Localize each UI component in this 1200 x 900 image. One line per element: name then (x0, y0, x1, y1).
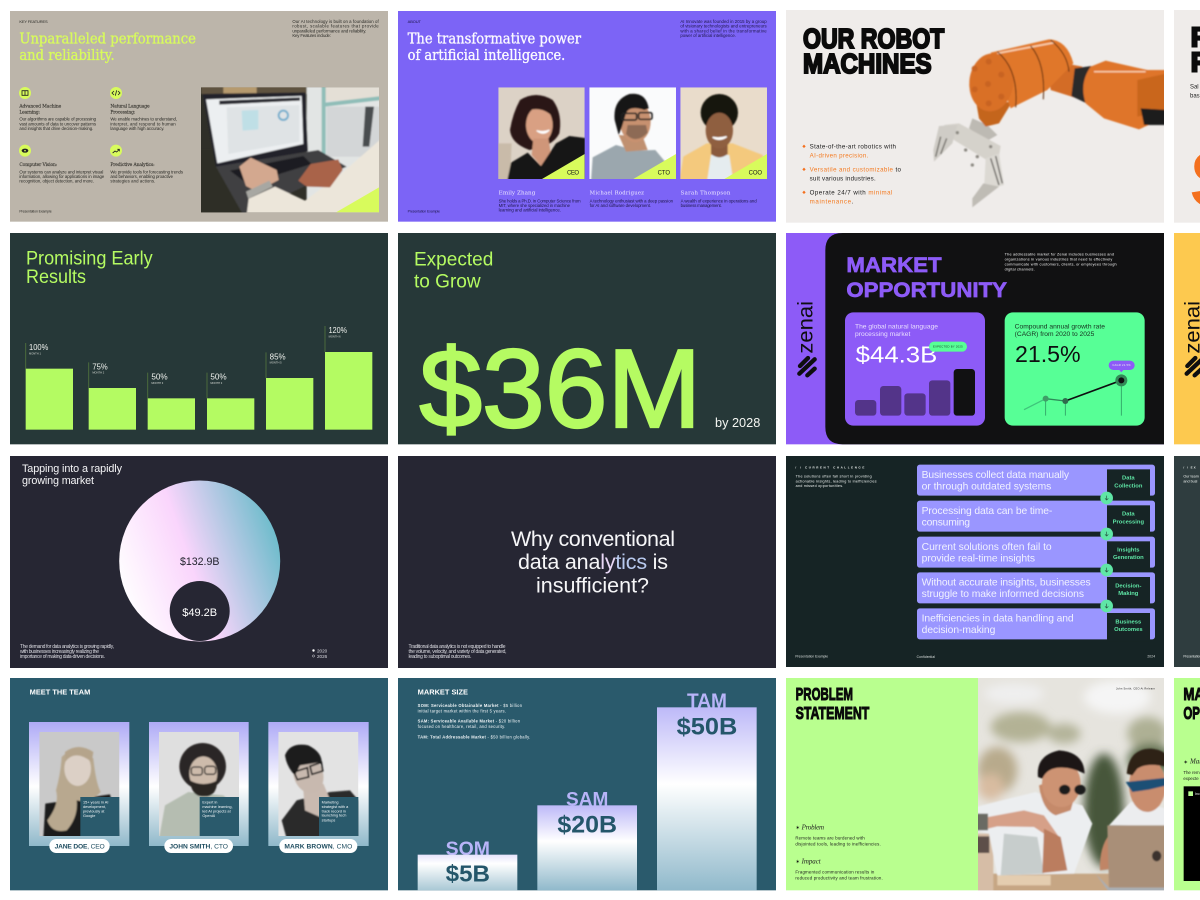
heading: Expected (414, 250, 493, 271)
problem note: ✶ (795, 826, 800, 832)
panel: partial slide, right edge top (1174, 10, 1200, 224)
process row 5: Inefficiencies in data handling and (922, 613, 1074, 624)
feature: natural language processing: We enable machines to understand, (110, 117, 177, 122)
feature: advanced machine learning: and insights that drive decision-making. (19, 126, 93, 131)
impact note: ✶ (795, 860, 800, 866)
process row 5: decision-making (922, 625, 996, 636)
heading: Results (26, 267, 86, 288)
bio: Sarah Thompson (681, 191, 757, 208)
partial heading letters (1191, 22, 1200, 78)
panel: partial market opportunity slide, right edge (1174, 678, 1200, 890)
panel: partial expertise slide, right edge (1174, 456, 1200, 667)
definitions: TAM: Total Addressable Market - $50 billion globally. (418, 735, 530, 740)
nested circle chart (119, 480, 280, 642)
bar chart (26, 326, 372, 430)
bar: SAM: $20B (557, 812, 617, 839)
process row 2 (917, 501, 1155, 534)
logo: zenai (793, 301, 817, 375)
bio box: Mark Brown (319, 797, 358, 836)
problem note: Problem (801, 823, 824, 831)
photo: Michael Rodriguez (589, 87, 676, 179)
heading: PROBLEM (796, 684, 853, 704)
process row 3: Generation (1113, 555, 1144, 561)
card: CAGR line chart: (CAGR) from 2020 to 2025 (1015, 331, 1095, 338)
bio: Sarah Thompson: A wealth of experience in operations and (681, 198, 757, 203)
team card: Mark Brown (268, 722, 369, 853)
bullet list: AI-driven precision. (810, 153, 869, 160)
footer: Presentation Example (795, 655, 828, 659)
intro text: communicate with customers, clients, or employees through (1005, 263, 1117, 267)
legend: 2026 (317, 654, 328, 659)
intro text (1005, 253, 1117, 271)
bar: TAM (657, 691, 757, 890)
panel: market size slide (398, 678, 776, 890)
feature: advanced machine learning: Our algorithms are capable of processing (19, 117, 97, 122)
bio box: Jane Doe: development, (83, 805, 106, 809)
card: CAGR line chart: CAGR 21.5% (1112, 363, 1131, 367)
feature: natural language processing (110, 104, 177, 131)
bar: SOM: SOM (446, 839, 490, 860)
image: orange robot arm with gripper (933, 38, 1164, 208)
heading: Promising Early (26, 249, 153, 270)
process row 4: struggle to make informed decisions (922, 589, 1084, 600)
bio box: John Smith (200, 797, 239, 836)
icon: eye (19, 145, 31, 157)
role tag: CEO: CEO (567, 171, 579, 177)
description: actionable insights, leading to inefficiencies (796, 479, 877, 483)
bar chart: 50% (151, 373, 168, 382)
intro text: with a shared belief in the transformative (680, 28, 767, 33)
heading: unparalleled performance: and reliability. (19, 47, 115, 64)
bio box: Jane Doe: previously at (83, 809, 105, 813)
panel: expected to grow slide (398, 233, 776, 451)
about label: ABOUT (408, 19, 422, 24)
bar chart: MONTH 1 (29, 351, 41, 355)
role tag: COO: COO (749, 171, 762, 177)
process row 1: Data (1122, 476, 1135, 482)
process row 5: Outcomes (1114, 627, 1143, 633)
by 2028 note: by 2028 (715, 416, 760, 430)
bullet list: State-of-the-art robotics with (810, 143, 897, 150)
bar chart: 85% (270, 352, 286, 361)
team card: Jane Doe (29, 722, 129, 853)
bio: Michael Rodriguez: for AI and software development. (590, 203, 651, 208)
process row 3: Current solutions often fail to (922, 542, 1052, 553)
definitions: SAM: Serviceable Available Market - $20 billion (418, 719, 521, 724)
partial market note: ✶ (1183, 760, 1188, 766)
feature: natural language processing: Natural Language (110, 104, 150, 110)
partial label and text: / / EX (1183, 465, 1197, 469)
card: CAGR line chart: 21.5% (1015, 341, 1081, 367)
icon: code (110, 87, 122, 99)
problem note (795, 823, 881, 847)
panel: meet the team slide (10, 678, 388, 890)
panel: current challenge slide (786, 456, 1164, 667)
large question: data analytics is (518, 550, 668, 574)
definitions: initial target market within the first 5 years. (418, 708, 506, 713)
bio box: John Smith: Expert in (202, 801, 217, 805)
photo: Emily Zhang (498, 87, 585, 179)
large question: insufficient? (536, 574, 649, 598)
impact note (795, 857, 883, 881)
card: market size bar chart: The global natural language (855, 323, 938, 330)
process row 3 (917, 537, 1155, 570)
feature: advanced machine learning (18, 104, 97, 131)
bio: Emily Zhang: She holds a Ph.D. in Computer Science from (499, 198, 581, 203)
heading: to Grow (414, 271, 481, 292)
partial market note (1183, 758, 1200, 781)
process row 2: Processing (1113, 519, 1144, 525)
large question: Why conventional (511, 527, 675, 551)
impact note: Impact (801, 857, 822, 865)
feature: predictive analytics: We provide tools for forecasting trends (110, 169, 183, 174)
card: CAGR line chart (1005, 312, 1145, 426)
feature: advanced machine learning: vast amounts of data to uncover patterns (19, 121, 96, 126)
partial black chart box (1184, 786, 1200, 881)
bio box: Mark Brown: Marketing (322, 801, 338, 805)
bio box: John Smith: machine learning, (202, 805, 233, 809)
bio: Michael Rodriguez (590, 191, 674, 208)
card: market size bar chart: EXPECTED BY 2025 (933, 344, 963, 348)
bullet list: suit various industries. (810, 176, 876, 183)
partial subtitle (1190, 84, 1200, 100)
team card: Jane Doe: JANE DOE, CEO (55, 843, 105, 850)
partial market note: The rem (1183, 770, 1200, 775)
heading (22, 463, 123, 487)
intro text (292, 19, 379, 38)
definitions: SOM: Serviceable Obtainable Market - $5 billion (418, 703, 523, 708)
impact note: Fragmented communication results in (795, 870, 875, 875)
photo: two men at a laptop (978, 678, 1164, 890)
panel: problem statement slide (786, 678, 1174, 892)
problem note: disjointed tools, leading to inefficiencies. (795, 842, 881, 847)
bar chart: MONTH 3 (151, 381, 164, 385)
feature: advanced machine learning: Learning: (19, 110, 40, 116)
bio box: Jane Doe: 15+ years in AI (83, 801, 108, 805)
bar: SOM: $5B (446, 860, 490, 886)
bio: Emily Zhang: learning and artificial intelligence. (499, 208, 561, 213)
feature: natural language processing: Processing: (110, 110, 136, 116)
key features label: KEY FEATURES (19, 19, 48, 24)
feature: natural language processing: interpret, and respond to human (110, 121, 176, 126)
definitions: focused on healthcare, retail, and security. (418, 724, 505, 729)
bio box: John Smith: OpenAI (202, 814, 215, 818)
feature: computer vision: Our systems can analyze and interpret visual (19, 169, 103, 174)
bar: SAM (537, 790, 637, 890)
partial label and text: Our team (1183, 474, 1199, 478)
bio box: Jane Doe (80, 797, 119, 836)
process row 5 (917, 608, 1155, 641)
legend (312, 648, 328, 659)
bio: Michael Rodriguez: Michael Rodriguez (590, 191, 644, 197)
feature: predictive analytics: Predictive Analytics: (110, 162, 155, 168)
heading: MEET THE TEAM (30, 688, 90, 697)
process row 2: Data (1122, 512, 1135, 518)
process row 1 (917, 465, 1155, 498)
process row 3: provide real-time insights (922, 553, 1035, 564)
process row 1: or through outdated systems (922, 481, 1051, 492)
bar chart: 100% (29, 343, 48, 352)
card: market size bar chart: processing market (855, 331, 910, 338)
logo: zenai: zenai (793, 301, 817, 354)
description (20, 644, 114, 660)
heading: our robot machines: MACHINES (803, 48, 932, 79)
feature: predictive analytics: strategies and actions. (110, 179, 155, 184)
process row 4: Making (1118, 591, 1139, 597)
description: importance of making data-driven decisions. (20, 654, 105, 660)
bar chart: MONTH 3 (210, 381, 223, 385)
bio box: Mark Brown: strategist with a (322, 805, 349, 809)
bar: SAM: SAM (566, 790, 608, 811)
process row 1: Collection (1114, 483, 1143, 489)
icon: trend arrow (110, 145, 122, 157)
panel: conventional analytics question slide (398, 456, 776, 668)
heading (414, 250, 493, 292)
description: Traditional data analytics is not equipped to handle (408, 644, 506, 650)
bio: Sarah Thompson: business management. (681, 203, 722, 208)
bar chart: 75% (92, 362, 108, 371)
process row 3: Insights (1117, 548, 1140, 554)
bio box: Mark Brown: launching tech (322, 814, 346, 818)
heading: transformative power: of artificial intelligence. (408, 47, 565, 64)
heading: our robot machines: OUR ROBOT (803, 23, 944, 54)
process row 5: Business (1115, 619, 1141, 625)
heading: unparalleled performance (19, 30, 196, 64)
intro text: robust, scalable features that provide (292, 24, 379, 29)
intro text: AI Innovate was founded in 2015 by a group (680, 19, 767, 24)
feature: predictive analytics (110, 162, 183, 184)
intro text: organizations in various industries that need to effectively (1005, 258, 1112, 262)
feature: predictive analytics: and behaviors, enabling proactive (110, 174, 174, 179)
process row 4: Decision- (1115, 584, 1142, 590)
description (408, 644, 506, 660)
partial subtitle: Sal (1190, 84, 1199, 90)
role tag: CTO: CTO (658, 171, 670, 177)
process row 4: Without accurate insights, businesses (922, 578, 1091, 589)
process row 2: Processing data can be time- (922, 506, 1052, 517)
definitions (418, 703, 530, 740)
partial label and text (1183, 465, 1200, 659)
panel: promising early results slide (10, 233, 388, 444)
impact note: reduced productivity and team frustration. (795, 876, 883, 881)
nested circle chart: $132.9B (180, 556, 219, 568)
intro text: The addressable market for Zenai includes businesses and (1005, 253, 1114, 257)
bio: Emily Zhang (499, 191, 581, 213)
heading (26, 249, 153, 288)
bio box: Jane Doe: Google (83, 814, 95, 818)
feature: computer vision: recognition, object detection, and more. (19, 179, 94, 184)
description: The solutions often fall short in providing (796, 474, 872, 478)
heading: Tapping into a rapidly (22, 463, 123, 475)
nested circle chart: $49.2B (182, 607, 217, 619)
team card: Mark Brown: MARK BROWN, CMO (284, 843, 352, 850)
footer: Confidential (917, 655, 935, 659)
feature: advanced machine learning: Advanced Machine (18, 104, 62, 110)
heading: MARKET (846, 253, 942, 277)
legend: 2020 (317, 648, 328, 654)
bar chart: MONTH 2 (92, 371, 105, 375)
team card: John Smith: JOHN SMITH, CTO (169, 843, 228, 850)
bar chart: 50% (210, 373, 227, 382)
large question (511, 527, 675, 598)
heading: unparalleled performance: Unparalleled performance (19, 30, 196, 47)
feature: computer vision (19, 162, 105, 184)
heading: MARKET SIZE (418, 690, 468, 697)
feature: computer vision: information, allowing for applications in image (19, 174, 105, 179)
bullet list (802, 143, 902, 206)
footer (795, 655, 1155, 659)
bullet list: Versatile and customizable to (810, 166, 902, 173)
panel: partial zenai slide, right edge (1174, 233, 1200, 444)
panel: key features slide (10, 11, 388, 222)
description: leading to suboptimal outcomes. (408, 654, 472, 660)
bio box: Mark Brown: startups (322, 818, 335, 822)
bar chart: MONTH 5 (270, 361, 282, 365)
bar chart: 120% (329, 326, 347, 335)
panel: robot machines slide (786, 10, 1167, 223)
description: and missed opportunities. (796, 484, 843, 488)
intro text: digital channels. (1005, 267, 1035, 271)
description: the volume, velocity, and variety of data generated, (408, 649, 506, 655)
heading (846, 253, 1007, 302)
process row 2: consuming (922, 517, 970, 528)
heading: transformative power: The transformative power (408, 30, 581, 47)
photo: Sarah Thompson (680, 87, 767, 179)
big number: $36M (419, 326, 701, 451)
problem note: Remote teams are burdened with (795, 836, 865, 841)
bio: Emily Zhang: MIT, where she specialized in machine (499, 203, 571, 208)
bio: Sarah Thompson: Sarah Thompson (681, 191, 731, 197)
intro text: of visionary technologists and entrepreneurs (680, 24, 767, 29)
intro text: unparalleled performance and reliability. (292, 28, 366, 33)
label: / / CURRENT CHALLENGE (795, 465, 864, 469)
intro text (680, 19, 767, 38)
bar: TAM: $50B (677, 714, 737, 741)
partial heading (1183, 684, 1200, 723)
team card: John Smith (149, 722, 249, 853)
card: CAGR line chart: Compound annual growth rate (1015, 323, 1105, 330)
card: market size bar chart: $44.3B (856, 342, 937, 368)
heading: our robot machines (803, 23, 944, 79)
footer label: Presentation Example (408, 209, 440, 213)
intro text: Key Features include: (292, 33, 331, 38)
description (796, 474, 877, 488)
process row 4 (917, 572, 1155, 605)
bullet list: Operate 24/7 with minimal (810, 189, 892, 196)
heading: STATEMENT (796, 703, 869, 723)
description: The demand for data analytics is growing rapidly, (20, 644, 114, 650)
panel: about slide (398, 11, 776, 222)
feature: computer vision: Computer Vision: (19, 162, 58, 168)
icon: book (19, 87, 31, 99)
bullet list: maintenance. (810, 199, 854, 206)
heading (796, 684, 869, 723)
bar: SOM (418, 839, 517, 890)
panel: market opportunity slide (786, 233, 1164, 444)
photo: hands on laptop (201, 87, 379, 212)
process row 1: Businesses collect data manually (922, 470, 1070, 481)
feature: natural language processing: language with high accuracy. (110, 126, 164, 131)
description: with businesses increasingly realizing the (20, 649, 99, 655)
heading: transformative power (408, 30, 581, 64)
footer: 2024 (1147, 655, 1155, 659)
arrow connectors (1100, 492, 1113, 612)
bio box: Mark Brown: track record in (322, 809, 346, 813)
bar: TAM: TAM (687, 691, 727, 713)
photo caption: John Smith, CEO At Relearn (1116, 687, 1156, 691)
footer label: Presentation Example (19, 209, 52, 213)
partial label and text: and busi (1183, 479, 1198, 483)
intro text: power of artificial intelligence. (680, 33, 736, 38)
bio box: John Smith: led AI projects at (202, 809, 232, 813)
partial market note: expecte (1183, 776, 1199, 781)
bar chart: MONTH 6 (329, 334, 341, 338)
card: market size bar chart (845, 312, 985, 426)
partial black chart box: Inc (1195, 792, 1200, 796)
heading: OPPORTUNITY (846, 278, 1007, 302)
logo: partial zenai (1180, 301, 1200, 375)
bio: Michael Rodriguez: A technology enthusiast with a deep passion (590, 198, 674, 203)
bio: Emily Zhang: Emily Zhang (499, 191, 536, 197)
heading: growing market (22, 475, 94, 487)
partial subtitle: bas (1190, 94, 1200, 100)
panel: growing market slide (10, 456, 388, 668)
intro text: Our AI technology is built on a foundation of (292, 19, 379, 24)
